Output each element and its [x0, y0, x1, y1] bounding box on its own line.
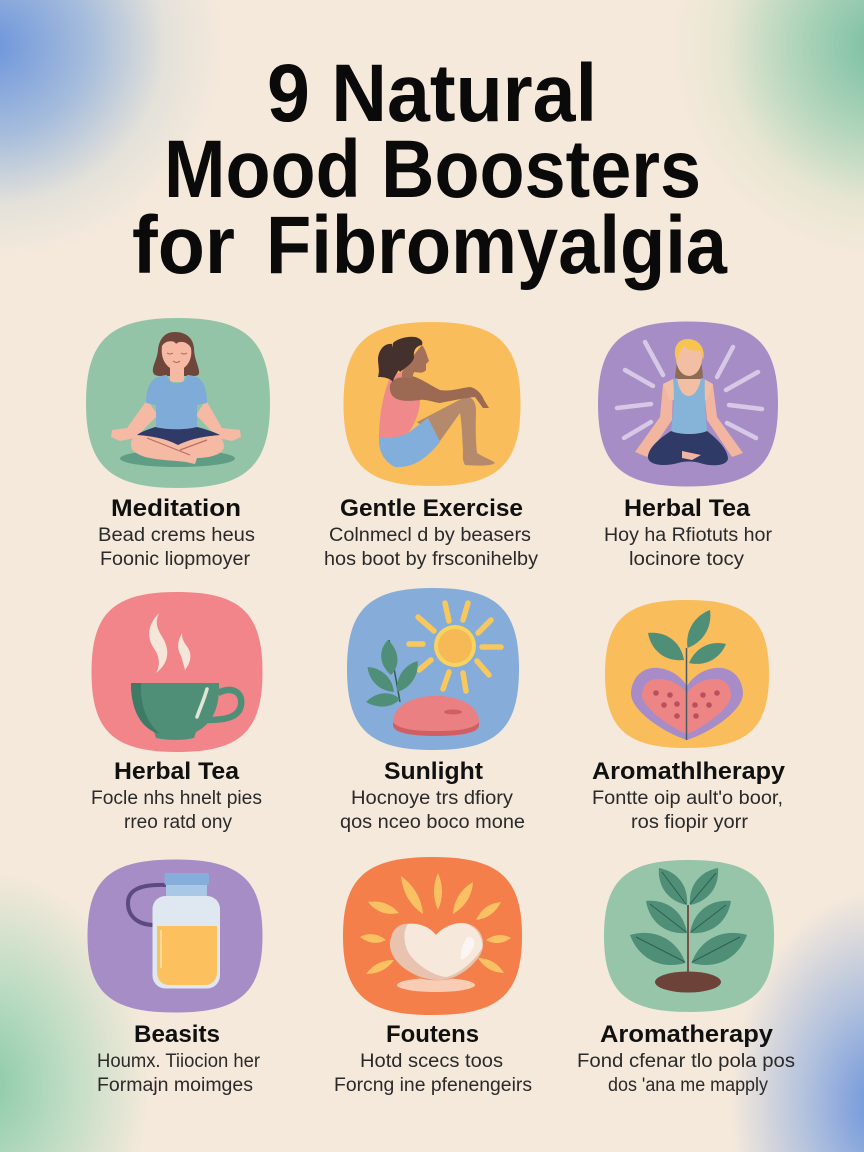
panel: foutens	[334, 857, 532, 1096]
panel: aromatherapy (plant)	[577, 860, 795, 1096]
panel: aromatherapy (heart plant)	[592, 600, 786, 833]
panel: gentle exercise	[324, 322, 539, 570]
description	[604, 525, 773, 570]
description	[98, 525, 255, 570]
heading: Aromathlherapy	[592, 758, 786, 785]
panel: herbal tea (cup)	[91, 592, 262, 833]
icon: bottle	[88, 860, 262, 1012]
heading: Herbal Tea	[624, 495, 751, 522]
icon: seated woman	[344, 322, 520, 486]
heading: Aromatherapy	[600, 1021, 774, 1048]
description: qos nceo boco mone	[340, 812, 525, 833]
heading: Sunlight	[384, 758, 483, 785]
description: hos boot by frsconihelby	[324, 549, 539, 570]
description	[97, 1051, 261, 1096]
icon: sun, leaves and stone	[347, 588, 519, 750]
heading: Herbal Tea	[114, 758, 240, 785]
description: Formajn moimges	[97, 1075, 253, 1096]
heading: Foutens	[386, 1021, 479, 1048]
description	[334, 1051, 532, 1096]
description: Hoy ha Rfiotuts hor	[604, 525, 773, 546]
heading: Beasits	[134, 1021, 220, 1048]
icon: yoga figure with rays	[598, 322, 778, 486]
description: Colnmecl d by beasers	[329, 525, 531, 546]
panel: herbal tea (yoga)	[598, 322, 778, 570]
description: Bead crems heus	[98, 525, 255, 546]
panel: beasits	[88, 860, 262, 1096]
description	[91, 788, 262, 833]
description: locinore tocy	[629, 549, 745, 570]
panel: sunlight	[340, 588, 525, 833]
icon: heart with sprout	[605, 600, 769, 748]
heading: Meditation	[111, 495, 241, 522]
description: Fond cfenar tlo pola pos	[577, 1051, 795, 1072]
title: Fibromyalgia	[266, 200, 728, 291]
description: Fontte oip ault'o boor,	[592, 788, 783, 809]
title: 9 Natural	[267, 48, 597, 139]
panel: meditation	[86, 318, 270, 570]
description: Focle nhs hnelt pies	[91, 788, 262, 809]
description: Hocnoye trs dfiory	[351, 788, 514, 809]
description	[577, 1051, 795, 1096]
description: Hotd scecs toos	[360, 1051, 503, 1072]
description: Foonic liopmoyer	[100, 549, 251, 570]
description: rreo ratd ony	[124, 812, 232, 833]
description	[592, 788, 783, 833]
title: for	[132, 200, 235, 291]
icon: meditating woman	[86, 318, 270, 488]
description	[324, 525, 539, 570]
description: Forcng ine pfenengeirs	[334, 1075, 532, 1096]
description: Houmx. Tiiocion her	[97, 1051, 261, 1072]
icon: glowing heart	[343, 857, 522, 1015]
title: Mood Boosters	[164, 124, 701, 215]
heading: Gentle Exercise	[340, 495, 523, 522]
icon: steaming cup	[92, 592, 262, 752]
description: dos 'ana me mapply	[608, 1075, 768, 1096]
icon: potted leaves	[604, 860, 774, 1012]
description	[340, 788, 525, 833]
title	[132, 48, 728, 291]
description: ros fiopir yorr	[631, 812, 749, 833]
